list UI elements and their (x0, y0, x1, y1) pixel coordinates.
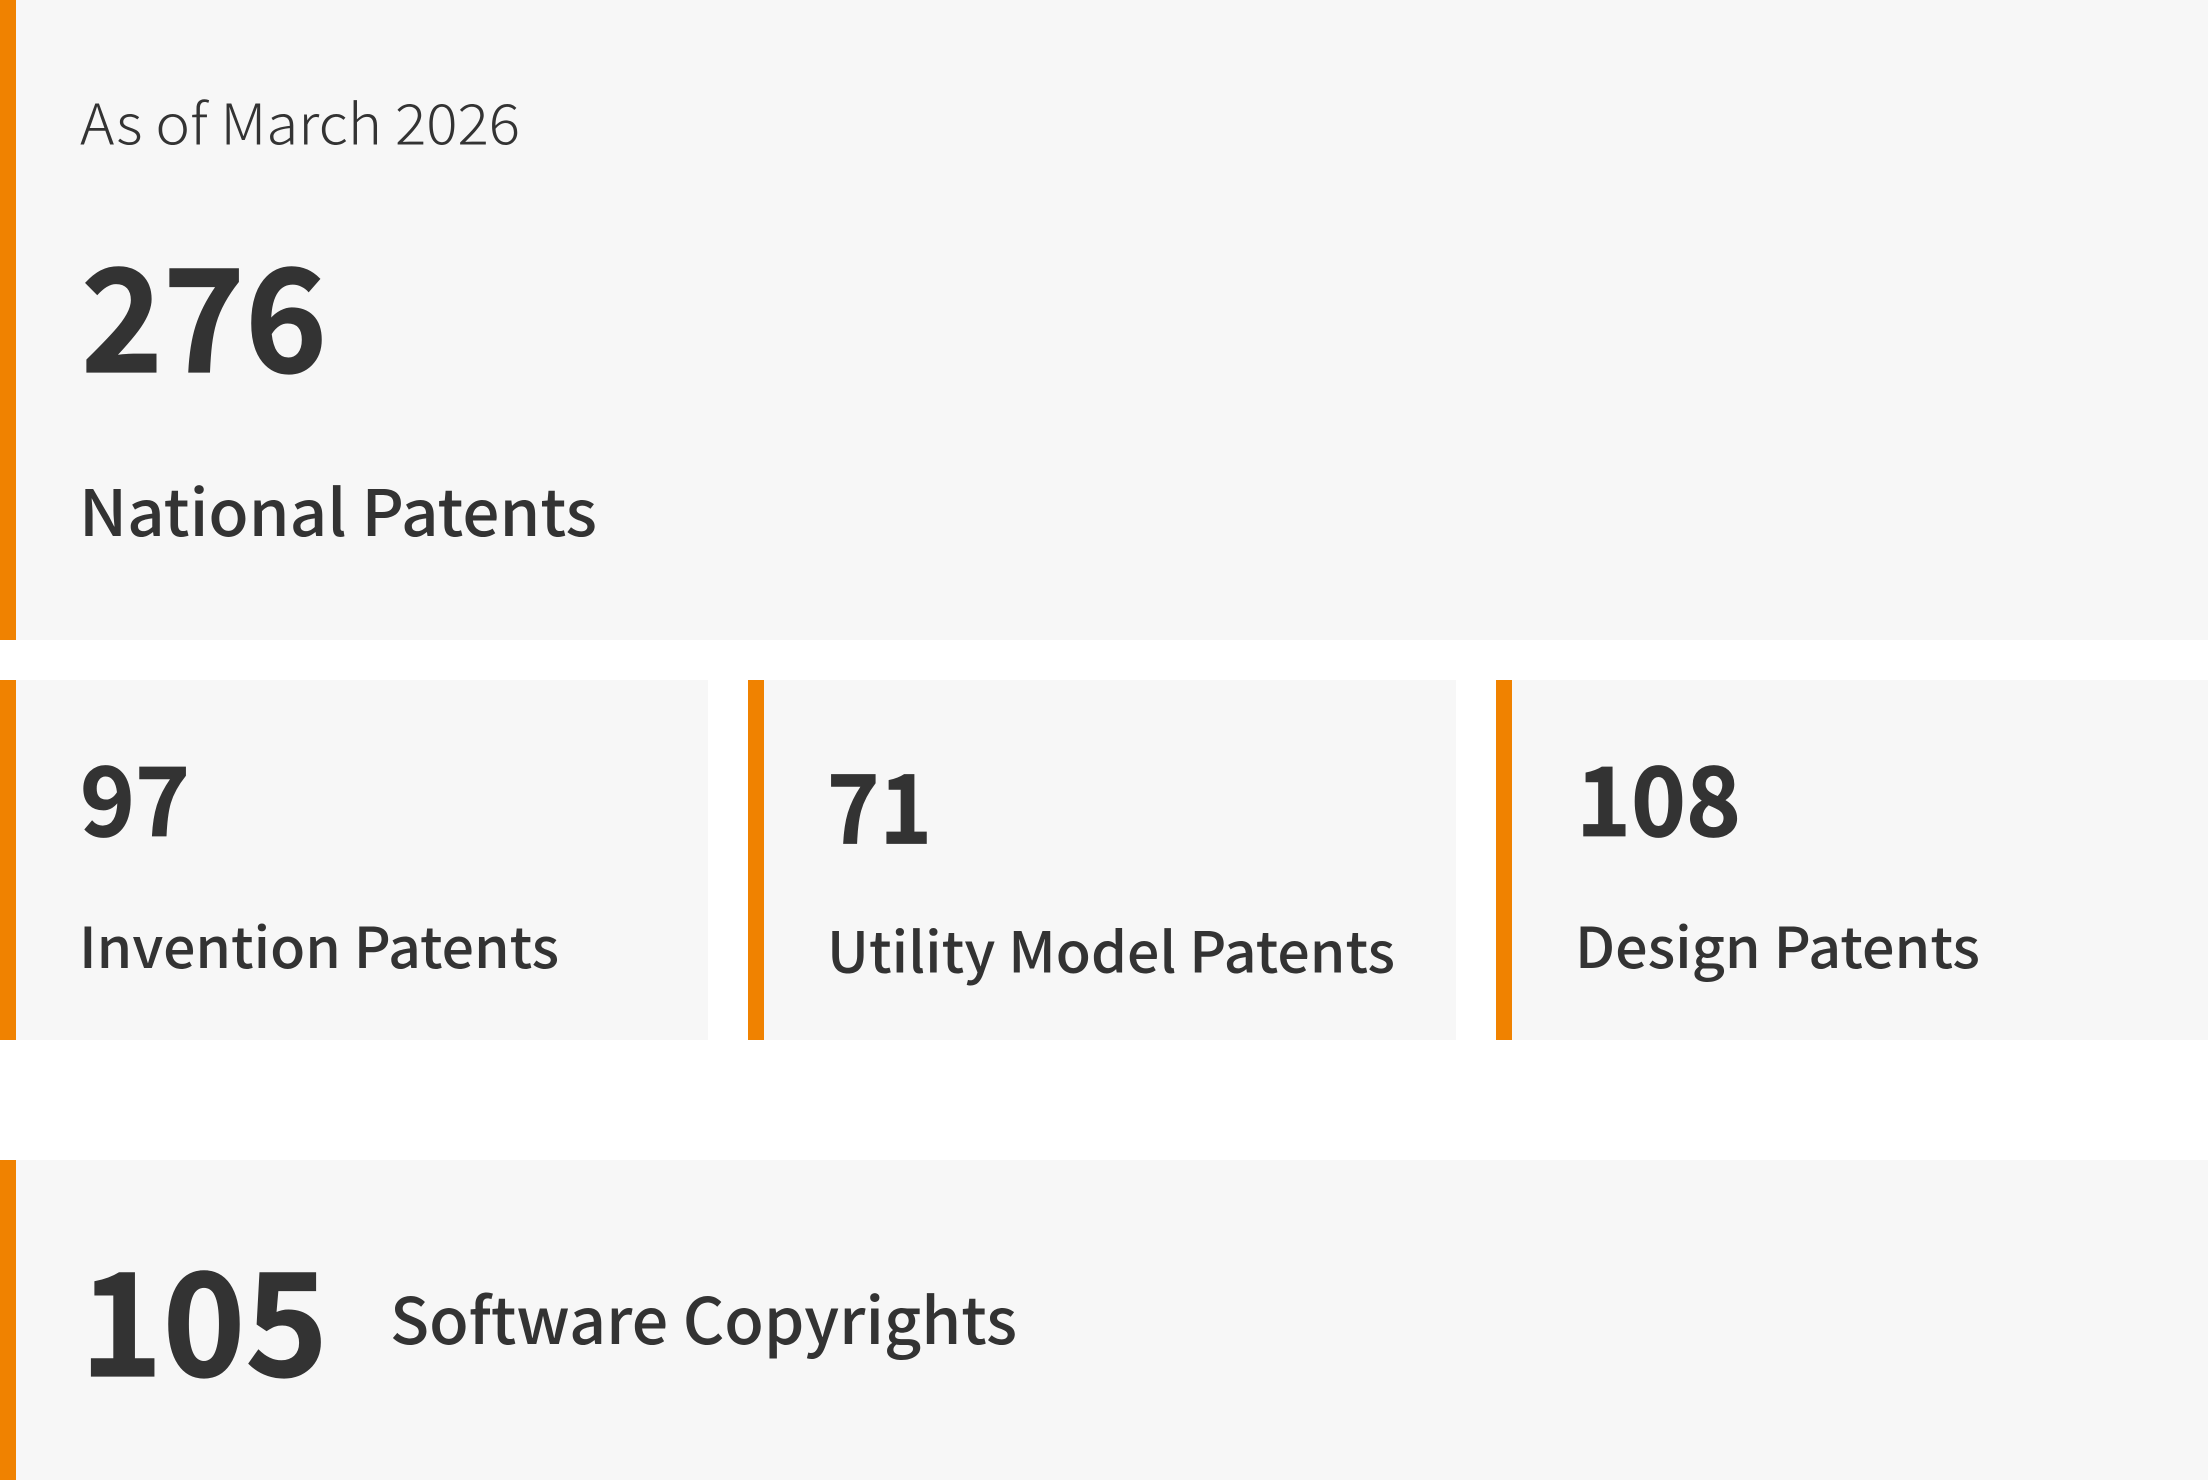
invention patents label: Invention Patents (79, 904, 559, 985)
national patents number: 276 (81, 207, 327, 414)
invention patents number: 97 (80, 725, 190, 864)
utility model patents number: 71 (827, 732, 932, 872)
design patents label: Design Patents (1575, 904, 1980, 985)
panel: design patents (1496, 680, 2208, 1040)
design patents number: 108 (1576, 725, 1741, 864)
software copyrights number: 105 (80, 1211, 328, 1418)
panel: utility model patents (748, 680, 1456, 1040)
date note: As of March 2026 (80, 80, 520, 162)
panel: national patents (0, 0, 2208, 640)
panel: invention patents (0, 680, 708, 1040)
software copyrights label: Software Copyrights (390, 1271, 1017, 1363)
panel: software copyrights (0, 1160, 2208, 1480)
national patents label: National Patents (79, 463, 597, 555)
utility model patents label: Utility Model Patents (827, 908, 1395, 990)
